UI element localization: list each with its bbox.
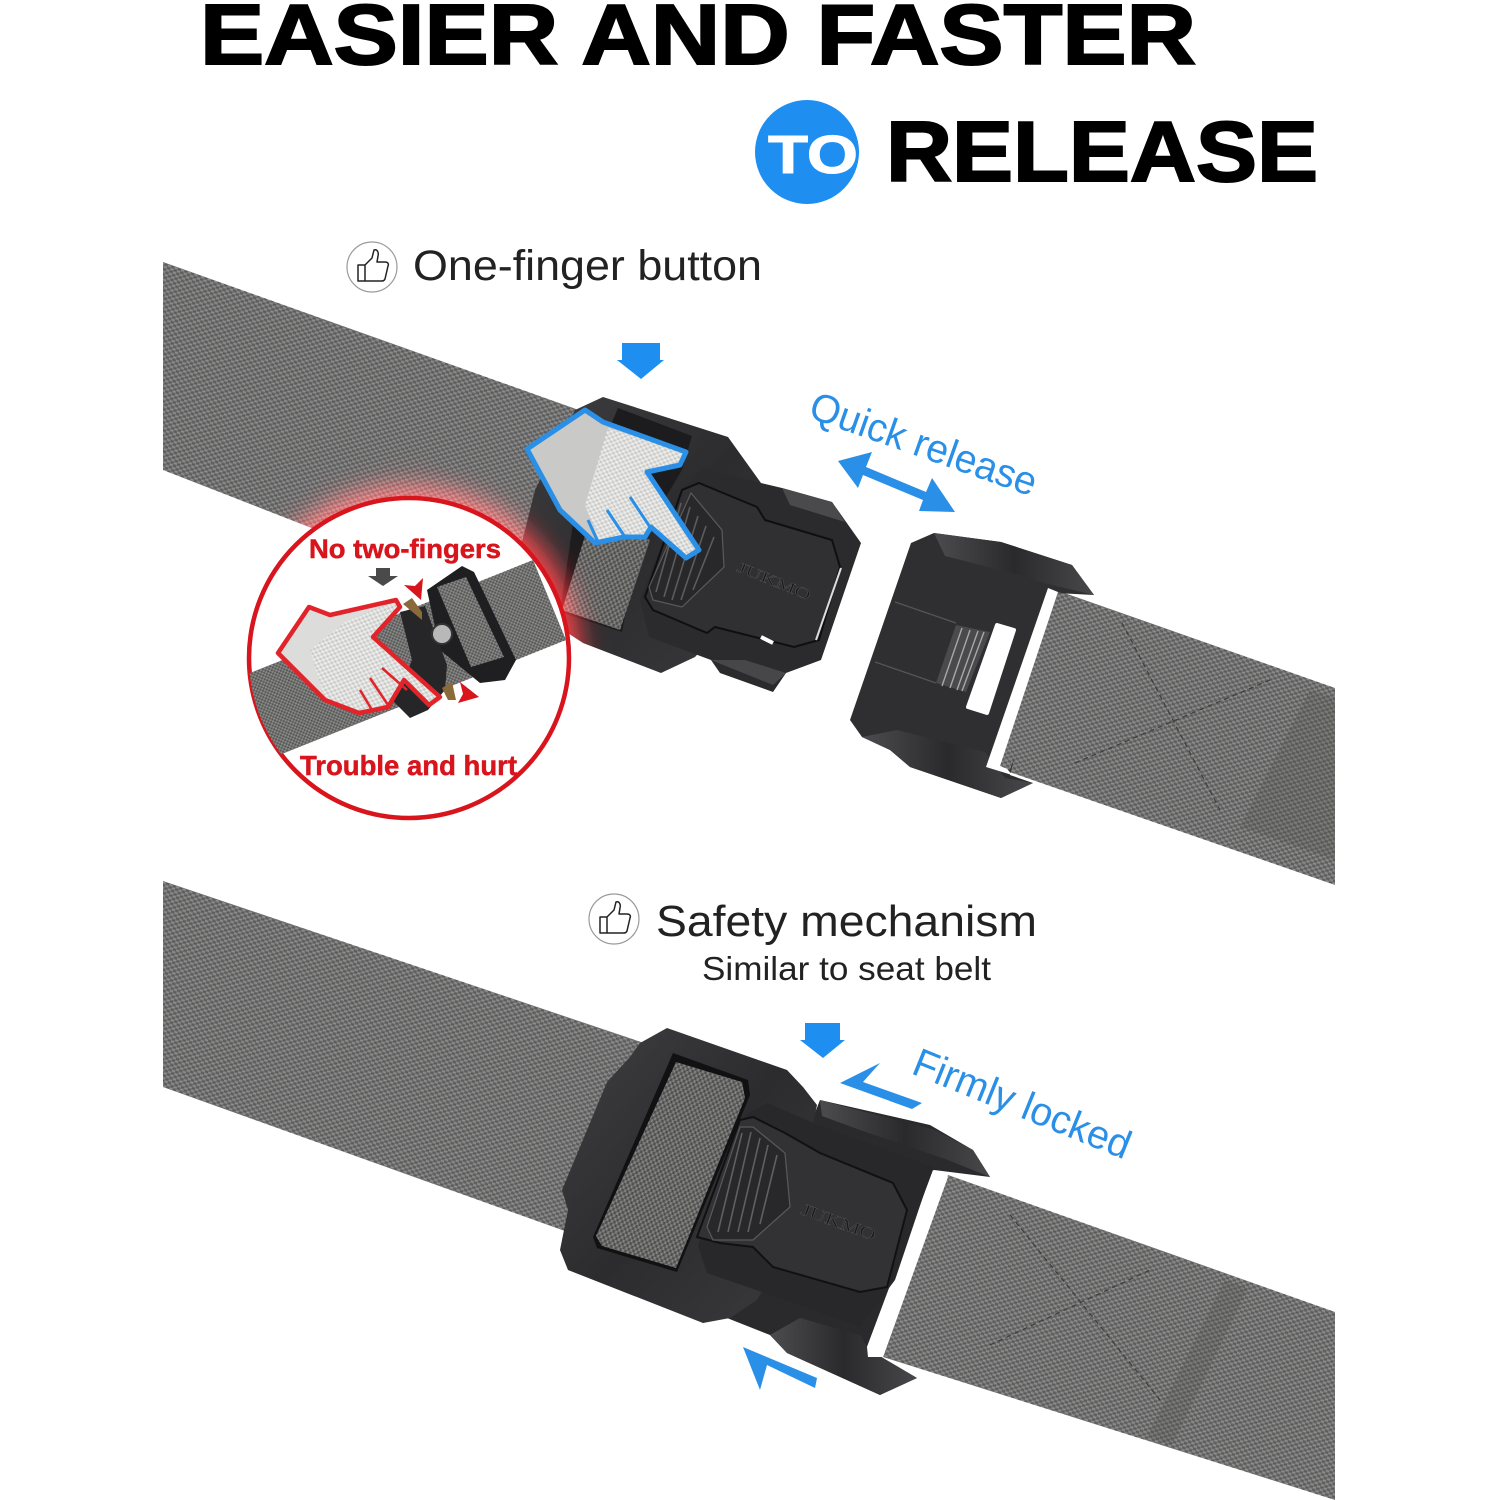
upper belt, left strap [163, 262, 590, 625]
finger hand overlay [527, 410, 699, 558]
slit [986, 588, 1058, 775]
strap edge over slit [1000, 592, 1070, 770]
icon: blue press arrow [617, 343, 664, 379]
callout text top: No two-fingers [309, 534, 501, 564]
slit [867, 1170, 948, 1357]
arrow: lower squeeze [743, 1347, 817, 1390]
grey down arrow [368, 568, 398, 586]
female body [850, 533, 1094, 798]
double arrow: quick release [838, 452, 955, 512]
ridged latch [936, 625, 990, 692]
frame slot with webbing [560, 408, 692, 632]
slot with webbing [593, 1053, 750, 1272]
frame [560, 1028, 817, 1323]
brand mark: JUKMO [735, 560, 813, 604]
text: One-finger button [413, 242, 762, 290]
icon: blue press arrow [800, 1023, 845, 1058]
female tail [727, 1100, 990, 1395]
arrow: upper squeeze [840, 1063, 922, 1109]
blue TO badge [755, 100, 859, 204]
upper buckle, female half [850, 533, 1094, 798]
brand mark: JUKMO [799, 1200, 878, 1244]
rectangular hole [968, 625, 1014, 713]
button shield [645, 483, 840, 647]
callout: no two-fingers [240, 498, 569, 818]
lower belt, left strap [163, 881, 650, 1240]
lower buckle [560, 1028, 990, 1395]
lower belt, right strap [883, 1175, 1335, 1500]
label: safety mechanism [589, 894, 1037, 987]
upper right strap [998, 590, 1335, 885]
small belt [240, 560, 566, 758]
ridged grip [707, 1127, 790, 1240]
red glow over belt [237, 486, 581, 830]
heading line two: RELEASE [886, 105, 1318, 200]
icon: thumbs up [347, 242, 397, 292]
subheading: Similar to seat belt [702, 950, 991, 987]
red outlined hand [278, 600, 440, 713]
heading: Safety mechanism [656, 897, 1037, 946]
label: firmly locked: Firmly locked [907, 1041, 1137, 1168]
label: one-finger button [347, 242, 762, 292]
top flange [934, 533, 1094, 595]
male tab body [640, 468, 861, 692]
label: quick release: Quick release [804, 384, 1043, 505]
lens circle [249, 498, 569, 818]
highlights [816, 568, 841, 640]
button shield [697, 1117, 907, 1292]
callout text bottom: Trouble and hurt [300, 750, 517, 781]
blue TO badge: TO [768, 125, 858, 185]
red arrowheads [404, 578, 423, 600]
ridged grip [649, 493, 724, 607]
title: Easier and faster to release [200, 0, 1318, 204]
upper buckle, male half with frame [510, 397, 861, 692]
buckle frame [510, 397, 790, 673]
bottom flange [862, 730, 1033, 798]
male plate [698, 1103, 933, 1327]
icon: thumbs up [589, 894, 639, 944]
cobra buckle [392, 566, 516, 718]
